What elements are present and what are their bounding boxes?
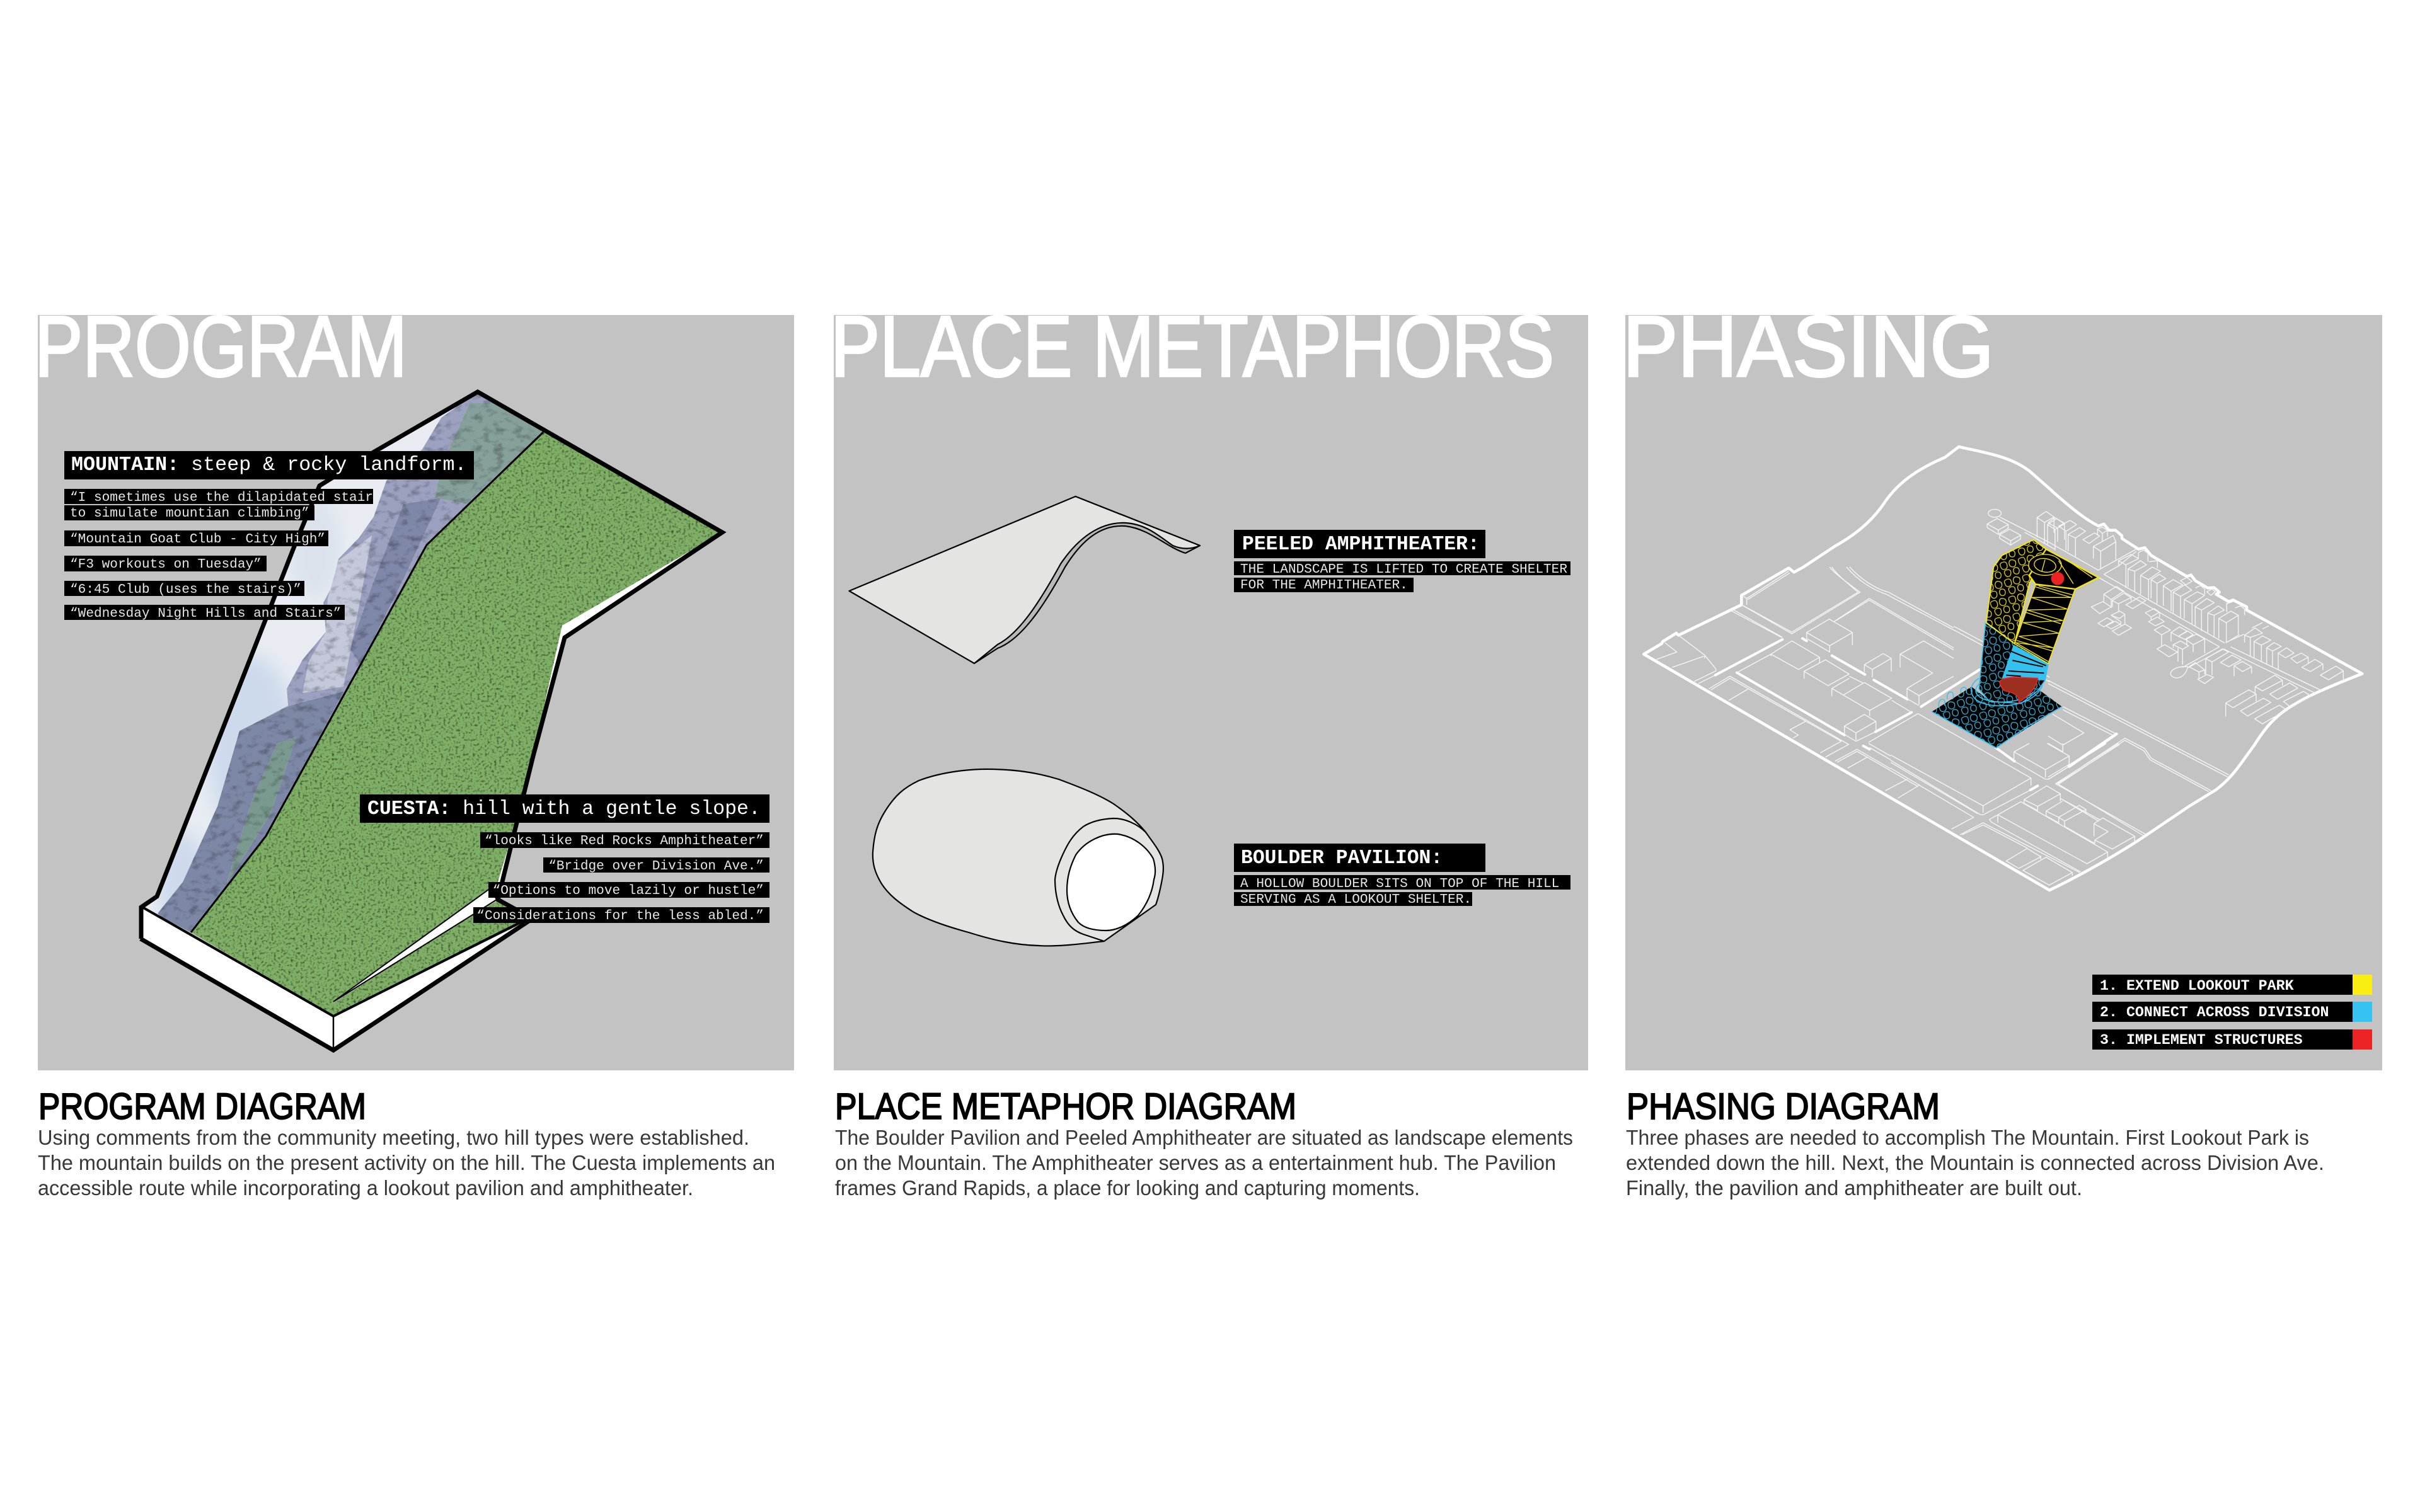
quotes: mountain: “6:45 Club (uses the stairs)”: [70, 582, 301, 597]
quotes: cuesta: “looks like Red Rocks Amphitheater”: [485, 833, 764, 849]
bottom of the site: [1891, 743, 2146, 885]
grass strip below ramp: [333, 901, 533, 1016]
title: PHASING: PHASING: [1623, 299, 1994, 395]
caption: place metaphor: PLACE METAPHOR DIAGRAM: [835, 1086, 1296, 1127]
quotes: cuesta: “Considerations for the less abled.”: [476, 908, 764, 924]
caption: program: PROGRAM DIAGRAM: [38, 1086, 366, 1127]
label: cuesta: CUESTA: hill with a gentle slope.: [367, 798, 761, 820]
caption: place metaphor: on the Mountain. The Amphitheater serves as a entertainment hub. The Pavilion: [835, 1151, 1556, 1174]
quotes: mountain: “I sometimes use the dilapidated stair: [70, 490, 373, 505]
title: PLACE METAPHORS: PLACE METAPHORS: [831, 299, 1554, 395]
label: boulder pavilion: [1234, 844, 1570, 907]
quotes: mountain: [64, 489, 373, 621]
icon: hollow boulder: [873, 769, 1163, 946]
caption: phasing: Finally, the pavilion and amphitheater are built out.: [1626, 1176, 2082, 1200]
quotes: mountain: “Wednesday Night Hills and Stairs”: [70, 606, 341, 621]
white sliver on the slope edge: [498, 532, 722, 901]
mountain photo: [145, 394, 542, 932]
label: boulder pavilion: SERVING AS A LOOKOUT SHELTER.: [1240, 892, 1472, 907]
red lookout pavilion: [2051, 572, 2064, 585]
quotes: cuesta: [473, 832, 769, 924]
label: peeled amphitheater: [1234, 530, 1570, 593]
site map: [1644, 447, 2362, 890]
legend row 3: [2092, 1029, 2372, 1050]
caption: phasing: extended down the hill. Next, the Mountain is connected across Division Ave.: [1626, 1151, 2324, 1174]
caption: place metaphor: frames Grand Rapids, a place for looking and capturing moments.: [835, 1176, 1420, 1200]
caption: program: accessible route while incorporating a lookout pavilion and amphitheater.: [38, 1176, 693, 1200]
phase 2: base and lower slope: [1932, 622, 2062, 748]
label: peeled amphitheater: FOR THE AMPHITHEATER.: [1240, 578, 1408, 593]
diagram: hill landform: [126, 378, 722, 1050]
legend row 2: 2. CONNECT ACROSS DIVISION: [2100, 1004, 2329, 1021]
outlines: [141, 392, 722, 1050]
panel: phasing: [1623, 299, 2382, 1070]
caption: phasing: PHASING DIAGRAM: [1627, 1086, 1940, 1127]
legend: [2092, 975, 2372, 1050]
boulder opening: [1067, 834, 1155, 931]
caption: program: The mountain builds on the present activity on the hill. The Cuesta implements an: [38, 1151, 775, 1174]
label: peeled amphitheater: THE LANDSCAPE IS LIFTED TO CREATE SHELTER: [1240, 562, 1567, 577]
label: boulder pavilion: BOULDER PAVILION:: [1241, 847, 1443, 869]
phase 1: stairs: [2015, 585, 2075, 663]
quotes: mountain: to simulate mountian climbing”: [70, 506, 309, 521]
panel: program: [35, 299, 794, 1070]
label: peeled amphitheater: PEELED AMPHITHEATER:: [1242, 534, 1480, 556]
caption: program: Using comments from the community meeting, two hill types were established.: [38, 1126, 749, 1149]
phase 1: lookout head: [2029, 549, 2099, 589]
title: PROGRAM: PROGRAM: [35, 299, 407, 395]
quotes: mountain: “Mountain Goat Club - City High”: [70, 532, 325, 547]
legend row 3: 3. IMPLEMENT STRUCTURES: [2100, 1032, 2303, 1048]
upper site, cul-de-sac and towers: [1804, 447, 2065, 682]
quotes: mountain: “F3 workouts on Tuesday”: [70, 557, 262, 572]
panel: place metaphors: [831, 299, 1588, 1070]
caption: phasing: Three phases are needed to accomplish The Mountain. First Lookout Park is: [1626, 1126, 2309, 1149]
icon: peeled landscape form: [850, 496, 1200, 663]
caption: place metaphor: The Boulder Pavilion and Peeled Amphitheater are situated as landscape elements: [835, 1126, 1573, 1149]
caption: program: [38, 1086, 775, 1200]
base side faces: [141, 907, 533, 1050]
red amphitheater: [2000, 677, 2037, 702]
legend row 1: 1. EXTEND LOOKOUT PARK: [2100, 978, 2294, 994]
left side of the site: [1644, 567, 2049, 890]
caption: place metaphor: [835, 1086, 1573, 1200]
caption: phasing: [1626, 1086, 2324, 1200]
legend row 2: [2092, 1002, 2372, 1022]
stair deck blue: [2002, 644, 2048, 680]
right side of the site: [2048, 491, 2362, 890]
label: boulder pavilion: A HOLLOW BOULDER SITS ON TOP OF THE HILL: [1240, 876, 1559, 891]
phase 1: upper hill trees: [1986, 540, 2046, 644]
label: mountain: MOUNTAIN: steep & rocky landform.: [71, 454, 467, 476]
legend row 1: [2092, 975, 2372, 995]
grass surface: [191, 432, 722, 1016]
rings at slope foot: [1971, 679, 2042, 706]
quotes: cuesta: “Options to move lazily or hustle”: [493, 883, 764, 898]
quotes: cuesta: “Bridge over Division Ave.”: [548, 859, 764, 874]
ramp wedge: [333, 888, 497, 1002]
phased hill path: [1932, 540, 2099, 748]
